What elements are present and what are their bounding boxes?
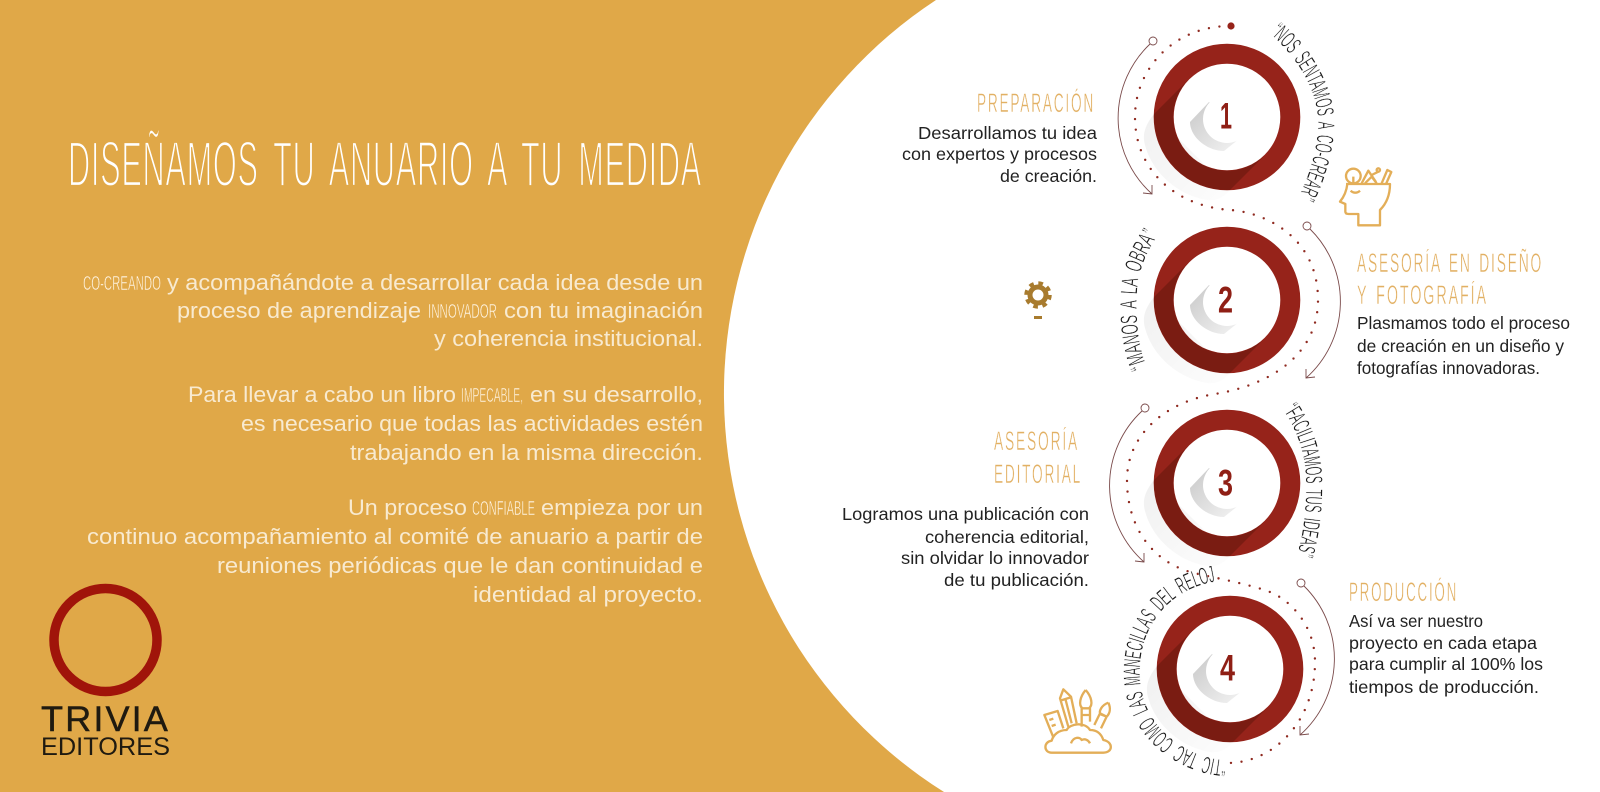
panel: white circular area (724, 0, 1600, 792)
text block: paragraph 3: CONFIABLE (472, 498, 535, 520)
step 2 label: Asesoría en diseño y fotografía: fotografías innovadoras. (1357, 358, 1540, 378)
step 3 ring: 3 (1218, 462, 1233, 504)
text block: paragraph 1: con tu imaginación (504, 298, 703, 323)
step 3 label: Asesoría editorial: Logramos una publicación con (842, 504, 1089, 524)
step 1 label: Preparación (902, 87, 1097, 186)
step 3 label: Asesoría editorial: coherencia editorial, (925, 527, 1089, 547)
text block: paragraph 3: empieza por un (541, 495, 703, 520)
text block: paragraph 3: Un proceso (348, 495, 467, 520)
step 2 ring: 2 (1218, 280, 1233, 320)
step 4 ring: 4 (1220, 648, 1235, 688)
logo: Trivia Editores (41, 588, 170, 761)
dotted connector path (1127, 26, 1318, 763)
step 4 label: Producción (1349, 576, 1543, 697)
arrow: step 1 (1118, 37, 1157, 194)
step 2 label: Asesoría en diseño y fotografía: Plasmamos todo el proceso (1357, 313, 1570, 333)
step 4 label: Producción: PRODUCCIÓN (1349, 576, 1458, 607)
icon: gear (1026, 284, 1050, 319)
step 1 label: Preparación: Desarrollamos tu idea (918, 123, 1097, 143)
step 3 ring (1144, 420, 1290, 566)
curved text: step 4: “TIC TAC COMO LAS MANECILLAS DEL RELOJ” (1124, 566, 1225, 776)
step 1 label: Preparación: con expertos y procesos (902, 144, 1097, 164)
step 2 label: Asesoría en diseño y fotografía (1357, 247, 1570, 378)
step 3 label: Asesoría editorial (842, 426, 1089, 590)
text block: paragraph 2: IMPECABLE, (461, 385, 523, 407)
text block: paragraph 3: continuo acompañamiento al comité de anuario a partir de (87, 524, 703, 549)
text block: paragraph 2: es necesario que todas las actividades estén (241, 411, 703, 436)
text block: paragraph 2: trabajando en la misma dirección. (350, 440, 703, 465)
curved text: step 3: “FACILITAMOS TUS IDEAS” (1286, 402, 1323, 558)
text block: paragraph 1 (83, 270, 703, 351)
text block: paragraph 3: reuniones periódicas que le dan continuidad e (217, 553, 703, 578)
step 1 label: Preparación: de creación. (1000, 166, 1097, 186)
text: DISEÑAMOS TU ANUARIO A TU MEDIDA (68, 128, 702, 200)
step 1 label: Preparación: PREPARACIÓN (977, 87, 1095, 118)
step 2 label: Asesoría en diseño y fotografía: Y FOTOGRAFÍA (1357, 280, 1488, 310)
text block: paragraph 3 (87, 495, 703, 607)
icon: art tools in cloud (1044, 689, 1111, 753)
step 4 label: Producción: para cumplir al 100% los (1349, 654, 1543, 674)
text block: paragraph 1: proceso de aprendizaje (177, 298, 421, 323)
curved text: step 2: “MANOS A LA OBRA” (1120, 227, 1155, 372)
icon: head with tools (1340, 168, 1391, 225)
step 3 label: Asesoría editorial: sin olvidar lo innovador (901, 548, 1089, 568)
text block: paragraph 1: y coherencia institucional. (434, 326, 703, 351)
logo: Trivia Editores: EDITORES (41, 733, 170, 761)
step 2 label: Asesoría en diseño y fotografía: de creación en un diseño y (1357, 336, 1564, 356)
text block: paragraph 1: INNOVADOR (428, 301, 497, 323)
step 3 label: Asesoría editorial: EDITORIAL (994, 459, 1082, 489)
text block: paragraph 3: identidad al proyecto. (473, 582, 703, 607)
text block: paragraph 2 (188, 382, 703, 465)
step 1 ring (1144, 54, 1290, 200)
step 4 ring (1147, 606, 1293, 752)
step 3 label: Asesoría editorial: ASESORÍA (994, 426, 1079, 456)
step 4 label: Producción: Así va ser nuestro (1349, 611, 1483, 631)
step 1 ring: 1 (1220, 96, 1232, 136)
step 3 label: Asesoría editorial: de tu publicación. (944, 570, 1089, 590)
step 4 label: Producción: tiempos de producción. (1349, 677, 1539, 697)
curved text: step 1: “NOS SENTAMOS A CO-CREAR” (1274, 22, 1334, 203)
text block: paragraph 2: en su desarrollo, (530, 382, 703, 407)
arrow: step 3 (1110, 404, 1149, 562)
step 2 ring (1144, 237, 1290, 383)
arrow: step 4 (1297, 579, 1334, 735)
text block: paragraph 2: Para llevar a cabo un libro (188, 382, 456, 407)
text block: paragraph 1: CO-CREANDO (83, 273, 161, 295)
logo: Trivia Editores: TRIVIA (41, 700, 170, 739)
start dot (1227, 22, 1235, 30)
step 4 label: Producción: proyecto en cada etapa (1349, 633, 1537, 653)
text block: paragraph 1: y acompañándote a desarrollar cada idea desde un (167, 270, 703, 295)
arrow: step 2 (1303, 222, 1340, 378)
